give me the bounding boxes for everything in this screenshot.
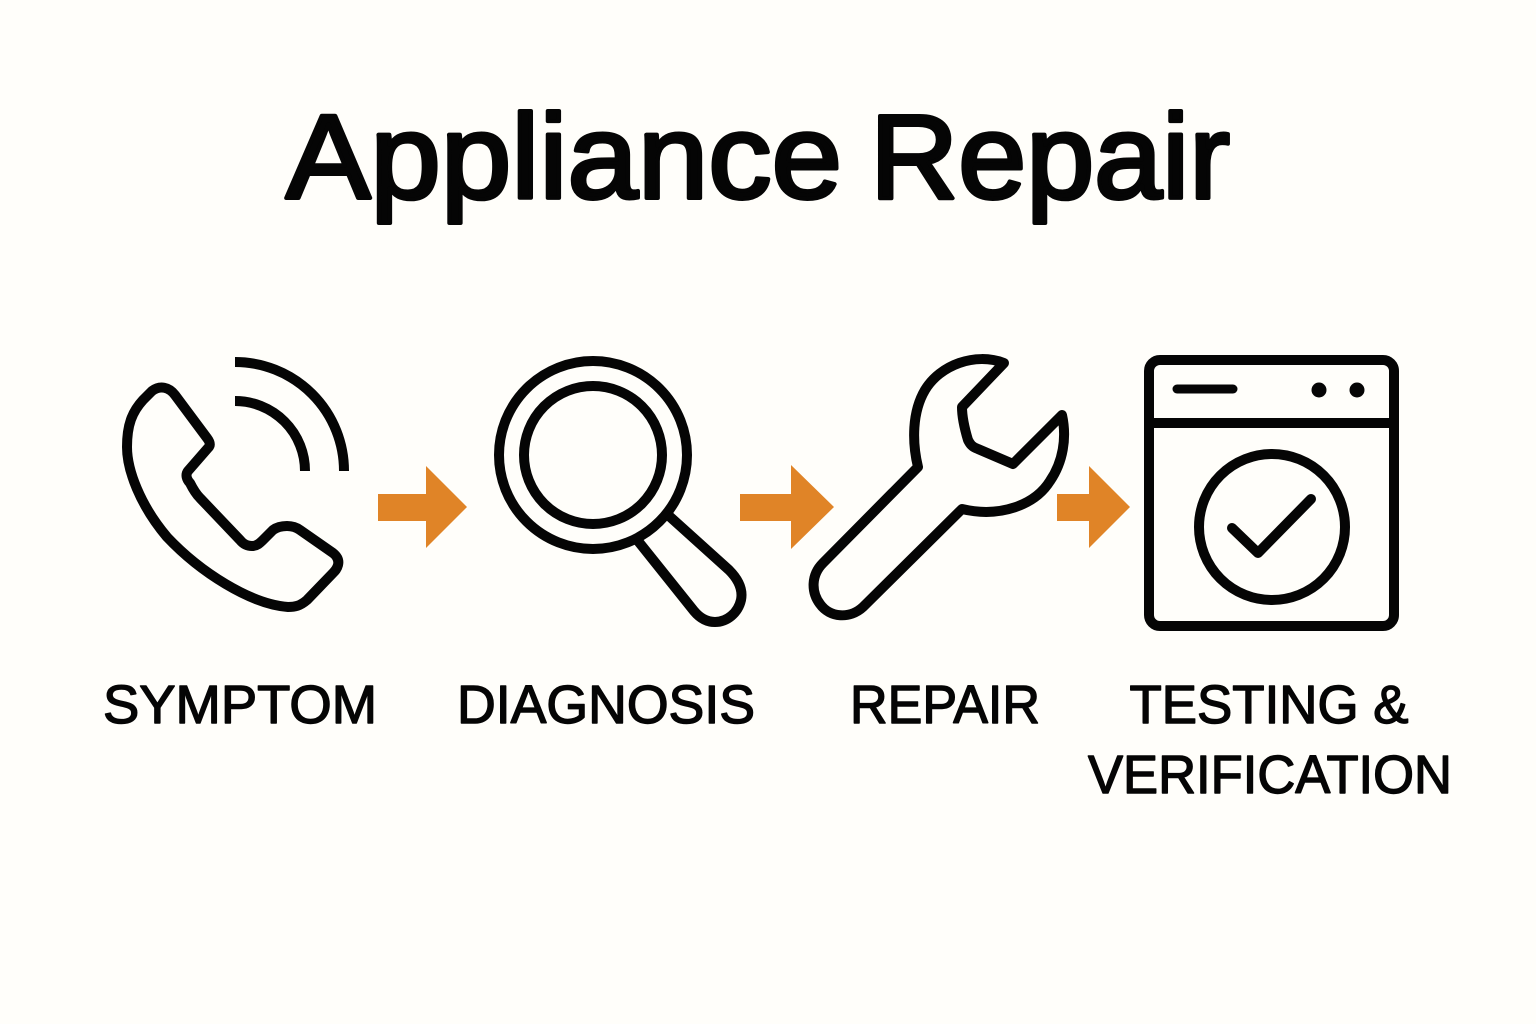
arrow: diagnosis to repair xyxy=(740,465,834,549)
icon: phone xyxy=(127,362,344,607)
title xyxy=(286,90,1230,224)
icon: magnifying glass xyxy=(499,361,742,622)
title: Repair xyxy=(870,90,1230,224)
label: symptom: SYMPTOM xyxy=(103,675,377,735)
label: diagnosis: DIAGNOSIS xyxy=(457,675,755,735)
label: testing and verification xyxy=(1088,675,1452,805)
icon: wrench xyxy=(814,359,1064,615)
title: Appliance xyxy=(286,90,842,224)
arrow: repair to testing xyxy=(1057,466,1130,548)
label: testing and verification: VERIFICATION xyxy=(1088,745,1452,805)
arrow: symptom to diagnosis xyxy=(378,466,467,548)
label: testing and verification: TESTING & xyxy=(1130,675,1408,735)
label: repair: REPAIR xyxy=(850,675,1040,735)
icon: washing machine with check xyxy=(1149,360,1394,626)
